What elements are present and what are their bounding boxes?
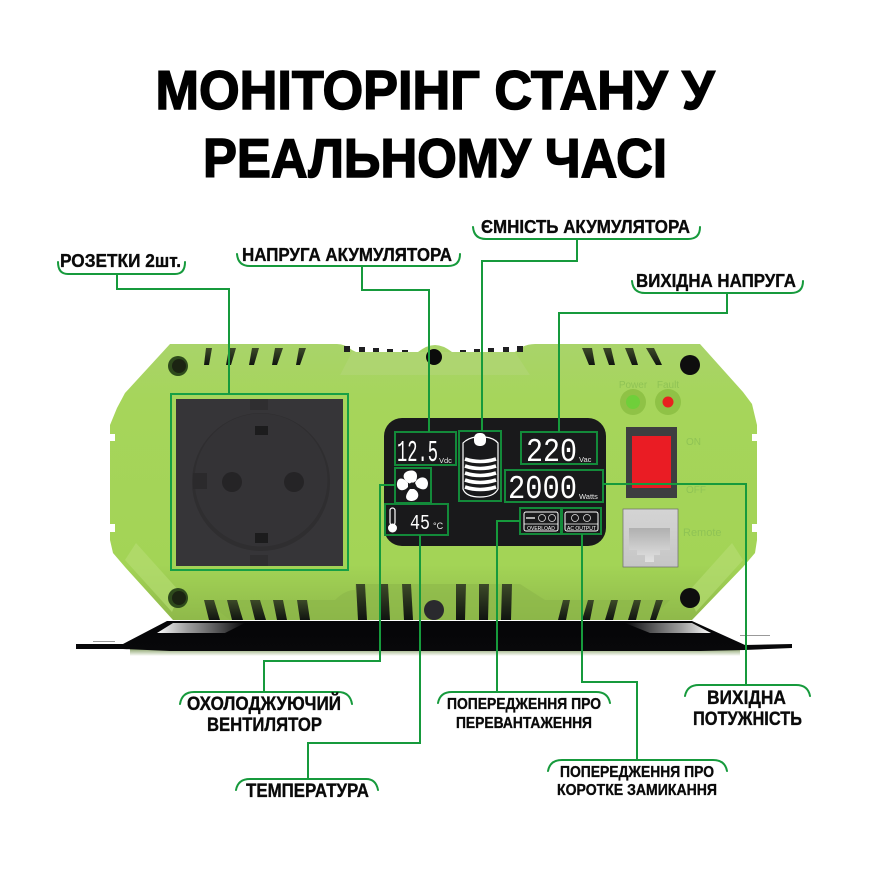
screw holes [168,349,700,620]
label: cooling fan: ОХОЛОДЖУЮЧИЙ [187,693,341,715]
output power readout: 2000 [508,471,577,508]
leader: output voltage [559,293,727,432]
label: output voltage: ВИХІДНА НАПРУГА [636,270,796,291]
output power readout: Watts [579,492,598,501]
device body [110,344,757,620]
overload warning: OVERLOAD [527,526,555,532]
leader: output power [603,484,746,685]
battery gauge [459,431,501,501]
indicator lights [619,380,681,415]
title: МОНІТОРІНГ СТАНУ У [156,59,715,121]
leader: short circuit warning [582,534,637,760]
vents [204,348,663,620]
inverter device [76,344,792,656]
label: cooling fan [180,692,352,736]
remote jack [623,509,722,567]
label: overload warning [438,692,610,732]
top ridge teeth [344,346,523,352]
label: battery voltage: НАПРУГА АКУМУЛЯТОРА [242,244,452,265]
temperature readout [385,504,448,536]
label: overload warning: ПЕРЕВАНТАЖЕННЯ [456,715,592,732]
AC output warning [562,508,601,534]
AC output warning: AC OUTPUT [567,526,596,532]
temperature readout: 45 [410,513,430,536]
label: cooling fan: ВЕНТИЛЯТОР [207,715,322,736]
power switch [626,427,706,498]
fan icon [395,468,431,503]
voltage readout: Vdc [439,456,452,465]
mounting base and shadow [76,621,792,656]
socket [176,399,343,566]
label: output power: ПОТУЖНІСТЬ [693,709,802,730]
voltage readout: 12.5 [397,436,438,471]
label: temperature: ТЕМПЕРАТУРА [246,781,369,802]
indicator lights: Fault [657,380,679,391]
LCD display [384,418,606,546]
AC voltage readout: 220 [526,434,577,471]
label: output power [685,685,810,730]
leader: battery voltage [362,266,429,432]
leader: sockets [117,274,229,394]
temperature readout: °C [433,521,444,531]
leader: temperature [308,535,420,779]
chamfer facets [125,543,743,612]
AC voltage readout: Vac [579,455,592,464]
indicator lights: Power [619,380,648,391]
socket highlight frame [171,394,348,570]
overload warning [520,508,561,534]
body shading [340,352,530,375]
label: sockets: РОЗЕТКИ 2шт. [60,250,181,271]
edge notches [110,434,757,532]
power switch: ON [686,437,701,448]
label: overload warning: ПОПЕРЕДЖЕННЯ ПРО [447,696,601,713]
title: РЕАЛЬНОМУ ЧАСІ [203,127,667,189]
label: short circuit warning [548,760,727,799]
label: output power: ВИХІДНА [707,688,786,709]
label: battery capacity: ЄМНІСТЬ АКУМУЛЯТОРА [481,216,690,237]
leader: overload warning [497,521,520,692]
label: short circuit warning: КОРОТКЕ ЗАМИКАННЯ [557,782,717,799]
label: short circuit warning: ПОПЕРЕДЖЕННЯ ПРО [560,764,714,781]
leader: battery capacity [482,239,577,431]
title [156,59,715,189]
leader: cooling fan [264,485,395,692]
power switch: OFF [686,485,706,496]
remote jack: Remote [683,527,722,539]
